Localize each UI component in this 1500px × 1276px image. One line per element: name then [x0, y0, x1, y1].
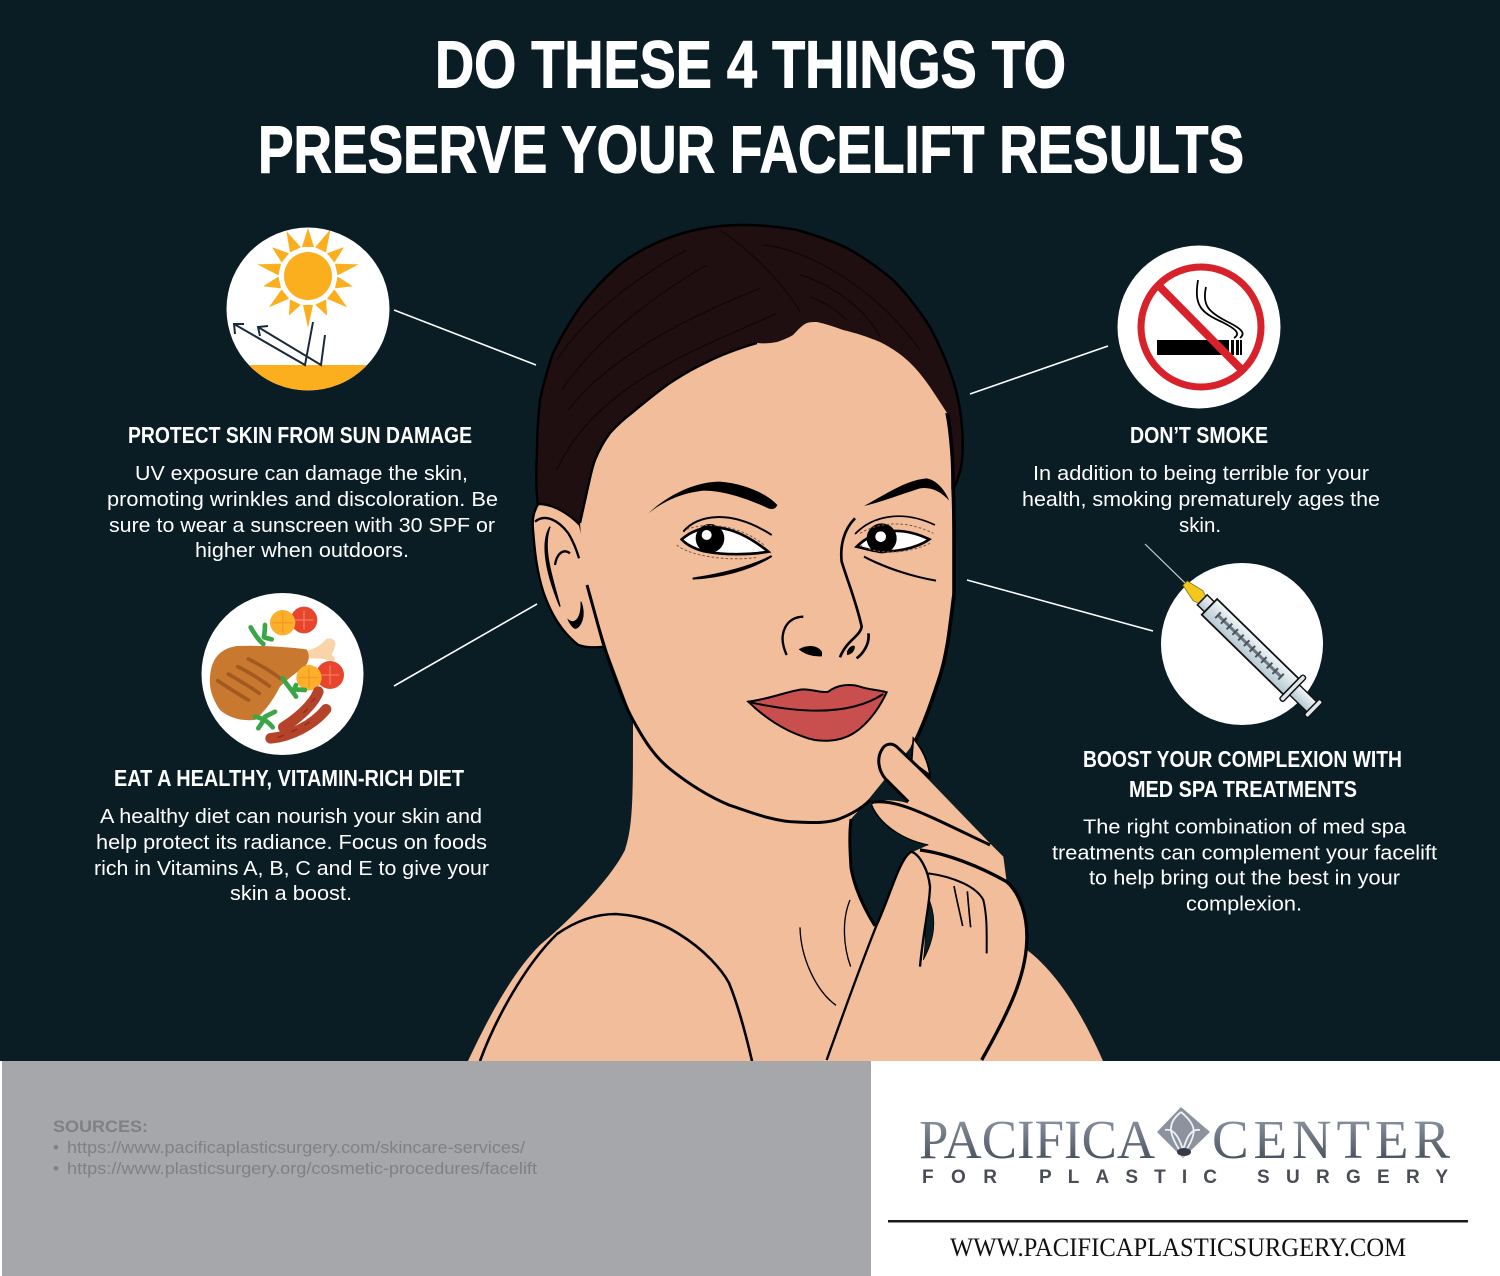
panel: sources	[2, 1061, 871, 1276]
neck right edge	[850, 819, 875, 926]
panel: sources: SOURCES:	[53, 1117, 148, 1136]
logo subtitle: PLASTIC	[1039, 1167, 1217, 1188]
text: diet	[94, 805, 489, 905]
logo divider	[888, 1220, 1468, 1222]
ear	[533, 504, 605, 647]
title: DO THESE 4 THINGS TO	[435, 28, 1066, 102]
connector line: smoke	[970, 346, 1108, 394]
gap between fingers	[923, 902, 934, 960]
left eye	[677, 517, 772, 579]
neck creases	[800, 900, 851, 1005]
logo wordmark: PACIFICA	[919, 1109, 1155, 1170]
connector line: diet	[394, 604, 537, 686]
sausages	[271, 692, 326, 738]
footer: white background	[0, 1061, 1500, 1276]
heading: don't smoke: DON’T SMOKE	[1130, 422, 1268, 448]
jaw line	[587, 585, 870, 823]
text: protect skin: promoting wrinkles and discoloration. Be	[107, 488, 498, 511]
logo subtitle: FOR	[922, 1167, 997, 1188]
illustration: woman's face and hand	[468, 225, 1103, 1062]
text: med spa: complexion.	[1186, 892, 1302, 915]
website address: WWW.PACIFICAPLASTICSURGERY.COM	[950, 1233, 1406, 1262]
hair	[536, 225, 963, 560]
text: med spa	[1052, 815, 1437, 915]
text: protect skin: higher when outdoors.	[195, 539, 409, 562]
face right contour	[912, 413, 954, 748]
text: don't smoke: skin.	[1179, 514, 1221, 537]
panel: sources: https://www.pacificaplasticsurgery.com/skincare-services/	[67, 1138, 525, 1157]
text: don't smoke	[1022, 462, 1380, 537]
text: med spa: The right combination of med spa	[1083, 815, 1407, 838]
text: diet: rich in Vitamins A, B, C and E to give your	[94, 857, 489, 880]
skin: face, neck and shoulder	[468, 322, 954, 1061]
icon: food plate	[202, 593, 364, 755]
icon: sun	[226, 228, 390, 390]
panel: sources: https://www.plasticsurgery.org/cosmetic-procedures/facelift	[67, 1159, 537, 1178]
logo subtitle: SURGERY	[1257, 1167, 1448, 1188]
right eye	[855, 516, 936, 581]
connector line: med spa	[967, 580, 1153, 631]
connector line: sun	[394, 310, 536, 365]
text: don't smoke: health, smoking prematurely ages the	[1022, 488, 1380, 511]
logo subtitle	[922, 1167, 1448, 1188]
panel: sources: •	[53, 1138, 59, 1157]
icon: no smoking	[1118, 246, 1280, 408]
right eyebrow	[864, 478, 949, 506]
text: med spa: treatments can complement your facelift	[1052, 841, 1437, 864]
hand shape	[825, 744, 1027, 1062]
tomatoes and oranges	[270, 607, 344, 690]
hairline edge	[580, 343, 757, 523]
left shoulder line	[480, 914, 752, 1061]
logo wordmark	[919, 1109, 1450, 1170]
logo mark: shell diamond	[1157, 1107, 1210, 1158]
text: protect skin: sure to wear a sunscreen with 30 SPF or	[109, 514, 495, 537]
heading: protect skin: PROTECT SKIN FROM SUN DAMAGE	[128, 422, 472, 448]
grill marks	[218, 659, 280, 700]
facial features	[648, 478, 949, 741]
skin behind finger	[912, 738, 930, 775]
text: diet: skin a boost.	[230, 882, 352, 905]
text: protect skin: UV exposure can damage the skin,	[135, 462, 468, 485]
heading: med spa	[1083, 746, 1402, 802]
text: don't smoke: In addition to being terrible for your	[1033, 462, 1369, 485]
title: PRESERVE YOUR FACELIFT RESULTS	[258, 112, 1244, 188]
heading: med spa: MED SPA TREATMENTS	[1129, 776, 1357, 802]
text: protect skin	[107, 462, 498, 562]
finger and thumb contours	[827, 744, 1027, 1060]
left eyebrow	[648, 482, 777, 513]
nose	[783, 518, 869, 658]
drumstick bone	[305, 638, 335, 661]
hair strands	[557, 230, 920, 470]
drumstick meat	[210, 646, 309, 720]
logo: Pacifica Center	[919, 1107, 1450, 1188]
lips	[748, 685, 887, 741]
text: med spa: to help bring out the best in your	[1089, 866, 1400, 889]
icon: syringe	[1133, 532, 1327, 725]
title	[258, 28, 1244, 188]
panel: sources: •	[53, 1159, 59, 1178]
right shoulder	[970, 950, 1103, 1061]
heading: diet: EAT A HEALTHY, VITAMIN-RICH DIET	[114, 765, 464, 791]
herbs	[251, 625, 305, 728]
heading: med spa: BOOST YOUR COMPLEXION WITH	[1083, 746, 1402, 772]
logo wordmark: CENTER	[1212, 1109, 1450, 1170]
hand	[800, 738, 1027, 1062]
text: diet: A healthy diet can nourish your skin and	[100, 805, 482, 828]
text: diet: help protect its radiance. Focus on foods	[96, 831, 487, 854]
